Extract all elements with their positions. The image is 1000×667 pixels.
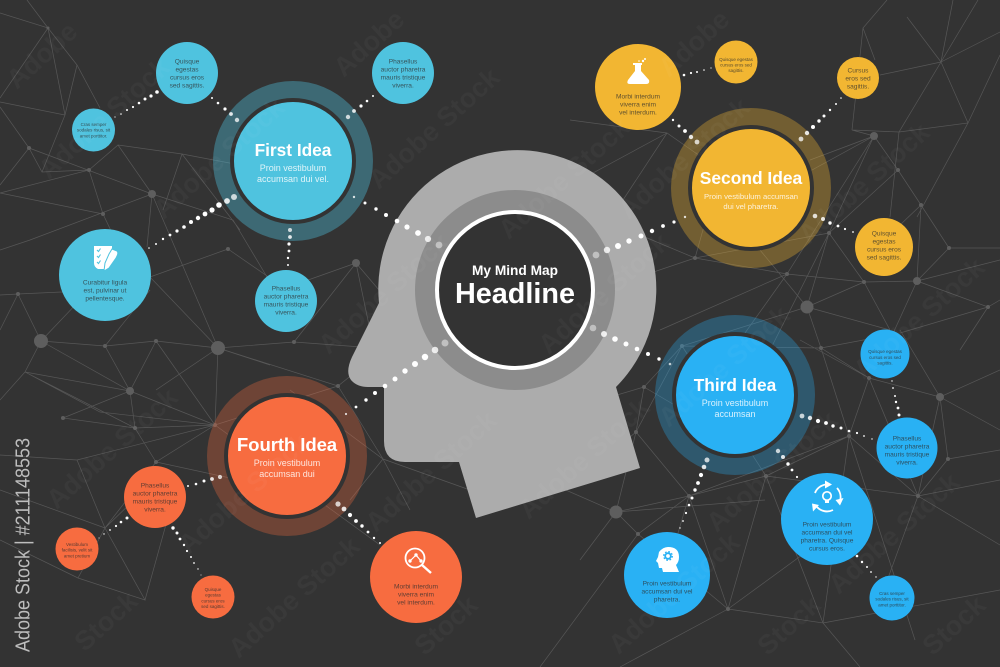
satellite: Vestibulum: Vestibulum: [66, 542, 88, 547]
second idea ring: [671, 108, 831, 268]
satellite: Phasellus: [124, 466, 186, 528]
satellite: Quisque small: cursus eros sed: [720, 62, 752, 67]
watermark pattern: Adobe Stock: [223, 530, 366, 664]
icon: lightbulb cycle: [812, 480, 844, 512]
center circle: headline: [415, 190, 615, 390]
satellite: Proin with head gear icon: Proin vestibulum: [643, 580, 692, 588]
watermark pattern: Stock: [752, 589, 827, 661]
second idea main circle: dui vel pharetra.: [723, 202, 779, 211]
watermark pattern: Stock: [409, 589, 484, 661]
satellite: Proin with lightbulb icon: Proin vestibulum: [803, 522, 852, 528]
satellite: Phasellus top: Phasellus: [389, 58, 418, 66]
satellite: Phasellus top: viverra.: [392, 82, 414, 90]
satellite: Phasellus: viverra.: [896, 460, 918, 466]
satellite: Quisque lower: [855, 218, 913, 276]
headline text: [455, 263, 575, 310]
satellite: Quisque small: sagittis.: [728, 68, 744, 73]
satellite: Phasellus bottom: Phasellus: [272, 286, 301, 292]
panel: first idea: [59, 42, 442, 332]
satellite: Phasellus: auctor pharetra: [885, 444, 930, 450]
satellite: Quisque lower: cursus eros: [867, 246, 902, 254]
watermark pattern: Adobe: [653, 4, 735, 83]
satellite: Proin with lightbulb icon: pharetra. Quisque: [801, 538, 854, 544]
watermark pattern: Adobe Stock: [533, 226, 676, 360]
icon: head with gear: [656, 547, 679, 572]
third idea main circle: Proin vestibulum: [702, 398, 768, 408]
icon: checklist and pen: [94, 246, 118, 271]
headline text: My Mind Map: [472, 263, 558, 278]
satellite: Quisque: egestas: [205, 593, 222, 598]
satellite: Morbi with magnifier icon: viverra enim: [398, 592, 434, 598]
satellite: Quisque egestas: Quisque: [175, 58, 200, 66]
satellite: Morbi with flask icon: [595, 44, 681, 130]
satellite: Quisque small: Quisque egestas: [719, 57, 754, 62]
satellite: Proin with head gear icon: pharetra.: [654, 596, 680, 604]
satellite: Proin with lightbulb icon: cursus eros.: [809, 546, 845, 552]
satellite: Cras semper: [870, 576, 914, 620]
satellite: Quisque egestas: sed sagittis.: [170, 82, 205, 90]
satellite: Quisque small top: sagittis.: [877, 360, 893, 366]
satellite: Vestibulum: facilisis, velit sit: [62, 548, 93, 553]
satellite: Cras semper: sodales risus, sit: [77, 128, 111, 133]
third idea main circle: Third Idea: [694, 375, 777, 395]
satellite: Phasellus: viverra.: [144, 506, 166, 514]
satellite: Quisque egestas: egestas: [175, 66, 199, 74]
satellite: Cras semper: sodales risus, sit: [875, 597, 909, 602]
satellite: Quisque: cursus eros: [201, 598, 225, 603]
connector dots: fourth idea: [98, 340, 448, 576]
satellite: Phasellus bottom: auctor pharetra: [264, 294, 309, 300]
watermark pattern: Adobe Stock: [823, 466, 966, 600]
satellite: Quisque egestas: cursus eros: [170, 74, 205, 82]
watermark pattern: Adobe Stock: [848, 251, 991, 385]
watermark pattern: Adobe Stock: [513, 391, 656, 525]
satellite: Phasellus: mauris tristique: [133, 498, 178, 506]
satellite: Phasellus top: mauris tristique: [381, 74, 426, 82]
satellite: Phasellus top: auctor pharetra: [381, 66, 426, 74]
satellite: Vestibulum: [56, 528, 98, 570]
watermark pattern: Adobe Stock: [613, 91, 756, 225]
watermark pattern: Adobe Stock: [41, 381, 184, 515]
satellite: Proin with head gear icon: accumsan dui vel: [642, 588, 693, 596]
watermark pattern: Adobe Stock: [33, 51, 176, 185]
satellite: Cras semper: Cras semper: [879, 591, 905, 596]
watermark pattern: Adobe Stock: [148, 91, 291, 225]
third idea ring: [655, 315, 815, 475]
satellite: Phasellus: Phasellus: [141, 482, 170, 490]
satellite: Phasellus: auctor pharetra: [133, 490, 178, 498]
watermark pattern: Adobe Stock: [493, 111, 636, 245]
icon: magnifier: [406, 548, 431, 573]
satellite: Cursus: eros sed: [845, 76, 871, 82]
watermark pattern: Adobe: [1, 16, 83, 95]
satellite: Proin with lightbulb icon: accumsan dui vel: [802, 530, 853, 536]
satellite: Curabitur with checklist icon: est, pulvinar ut: [84, 287, 127, 294]
second idea main circle: Proin vestibulum accumsan: [704, 192, 798, 201]
satellite: Morbi with magnifier icon: Morbi interdum: [394, 584, 438, 590]
satellite: Quisque: sed sagittis.: [201, 604, 225, 609]
satellite: Cras semper: Cras semper: [81, 122, 107, 127]
satellite: Cras semper: amet porttitor.: [878, 602, 906, 607]
second idea main circle: Second Idea: [700, 168, 803, 188]
satellite: Morbi with flask icon: viverra enim: [620, 102, 656, 108]
satellite: Curabitur with checklist icon: [59, 229, 151, 321]
first idea main circle: First Idea: [255, 140, 332, 160]
panel: second idea: [593, 40, 913, 276]
watermark pattern: Adobe Stock: [360, 404, 503, 538]
satellite: Quisque small top: Quisque egestas: [868, 349, 903, 354]
satellite: Quisque egestas: [156, 42, 218, 104]
icon: flask: [627, 58, 649, 84]
satellite: Quisque: [192, 576, 234, 618]
watermark pattern: Adobe Stock: [793, 116, 936, 250]
satellite: Proin with head gear icon: [624, 532, 710, 618]
satellite: Cursus: [837, 57, 879, 99]
satellite: Phasellus bottom: [255, 270, 317, 332]
watermark pattern: Adobe Stock: [701, 404, 844, 538]
watermark pattern: Stock: [69, 585, 144, 657]
fourth idea ring: [207, 376, 367, 536]
first idea main circle: [232, 100, 354, 222]
satellite: Quisque lower: sed sagittis.: [867, 254, 902, 262]
head silhouette: [348, 150, 656, 518]
watermark pattern: Stock: [917, 589, 992, 661]
vertical stock credit: Adobe Stock | #211148553: [12, 438, 34, 652]
satellite: Quisque small: [714, 40, 758, 84]
watermark pattern: Adobe: [328, 4, 410, 83]
connector dots: first idea: [114, 90, 442, 266]
satellite: Quisque lower: egestas: [872, 238, 896, 246]
connector dots: third idea: [590, 325, 900, 578]
first idea main circle: Proin vestibulum: [260, 163, 326, 173]
watermark pattern: Adobe Stock: [313, 226, 456, 360]
satellite: Cras semper: [72, 108, 115, 152]
satellite: Quisque: Quisque: [205, 587, 222, 592]
satellite: Curabitur with checklist icon: Curabitur ligula: [83, 279, 128, 286]
second idea main circle: [690, 127, 812, 249]
fourth idea main circle: Proin vestibulum: [254, 458, 320, 468]
satellite: Quisque small top: [860, 330, 910, 378]
fourth idea main circle: accumsan dui: [259, 469, 315, 479]
third idea main circle: accumsan: [714, 409, 756, 419]
panel: third idea: [590, 315, 938, 620]
satellite: Vestibulum: amet pretium: [64, 553, 90, 558]
fourth idea main circle: [226, 395, 348, 517]
satellite: Curabitur with checklist icon: pellentesque.: [85, 295, 125, 302]
connector dots: second idea: [593, 67, 854, 258]
fourth idea main circle: Fourth Idea: [237, 434, 338, 455]
satellite: Phasellus: [876, 418, 938, 478]
headline text: Headline: [455, 278, 575, 310]
satellite: Cras semper: amet porttitor.: [80, 133, 107, 138]
watermark pattern: Adobe Stock: [363, 61, 506, 195]
satellite: Phasellus bottom: mauris tristique: [264, 302, 309, 308]
satellite: Phasellus: Phasellus: [893, 436, 922, 442]
satellite: Quisque lower: Quisque: [872, 230, 897, 238]
satellite: Phasellus: mauris tristique: [885, 452, 930, 458]
first idea ring: [213, 81, 373, 241]
watermark pattern: Adobe Stock: [653, 299, 796, 433]
satellite: Morbi with flask icon: Morbi interdum: [616, 94, 660, 100]
third idea main circle: [674, 334, 796, 456]
panel: fourth idea: [56, 340, 462, 623]
satellite: Cursus: sagittis.: [847, 84, 869, 90]
satellite: Morbi with flask icon: vel interdum.: [619, 110, 657, 116]
watermark pattern: Adobe Stock: [173, 426, 316, 560]
satellite: Cursus: Cursus: [848, 68, 869, 74]
satellite: Phasellus top: [372, 42, 434, 104]
satellite: Quisque small top: cursus eros sed: [869, 355, 901, 360]
satellite: Phasellus bottom: viverra.: [275, 310, 297, 316]
satellite: Proin with lightbulb icon: [781, 473, 873, 565]
first idea main circle: accumsan dui vel.: [257, 174, 329, 184]
satellite: Morbi with magnifier icon: vel interdum.: [397, 600, 435, 606]
watermark pattern: Adobe Stock: [603, 526, 746, 660]
satellite: Morbi with magnifier icon: [370, 531, 462, 623]
